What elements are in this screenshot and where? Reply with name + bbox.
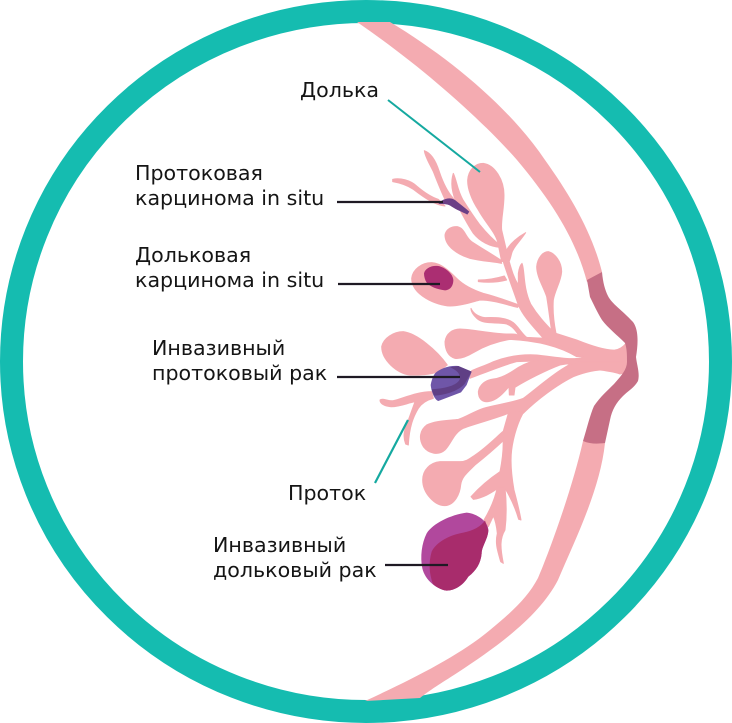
lobule with main lower band [420,362,623,453]
duct: to lobular tumour [484,487,506,563]
lobule: top [468,163,508,262]
twig: left [393,179,445,206]
icon: lobular carcinoma in situ [424,266,453,290]
leader line: lobule [388,100,480,172]
twig: top [424,151,457,205]
leader line: lobular carcinoma in situ [338,283,440,285]
label: invasive lobular cancer: Инвазивный [213,533,346,557]
lobule: small upper left [445,227,502,263]
leader line: duct [375,420,408,483]
nipple and areola [583,272,639,444]
lobule: mid with stem [445,329,583,358]
leader line: invasive ductal [337,376,460,378]
lobule: with lobular carcinoma [412,263,519,307]
lower trunk [497,410,525,520]
label: lobular carcinoma in situ: Дольковая [135,243,251,267]
icon: ductal carcinoma in situ [438,198,469,215]
lobule: lower [423,432,504,506]
ducts and lobules, upper part [393,151,633,378]
leader line: ductal carcinoma in situ [337,201,443,203]
lobule: large left [382,332,447,375]
twig: central [471,308,552,343]
label: invasive ductal cancer: протоковый рак [152,361,327,385]
ducts and lobules, lower part [380,332,623,563]
twig: lower short [471,472,500,499]
breast outline: skin band [357,22,605,701]
icon: invasive lobular carcinoma [421,513,488,591]
label: lobule: Долька [300,78,379,102]
icon: invasive ductal carcinoma [431,366,472,401]
leader line: invasive lobular [385,564,448,566]
label: lobular carcinoma in situ: карцинома in situ [135,268,324,292]
label: invasive lobular cancer: дольковый рак [213,558,377,582]
duct to invasive ductal tumour [470,355,587,378]
label: duct: Проток [288,481,366,505]
twig: long [452,173,501,247]
label: ductal carcinoma in situ: карцинома in situ [135,186,324,210]
twig: short [478,276,507,282]
label: ductal carcinoma in situ: Протоковая [135,161,263,185]
lobule: small low [478,361,570,402]
label: invasive ductal cancer: Инвазивный [152,336,285,360]
duct: left tail [380,392,433,445]
upper trunk [502,257,633,374]
lobule: right [537,252,562,333]
twig: right [507,233,526,261]
